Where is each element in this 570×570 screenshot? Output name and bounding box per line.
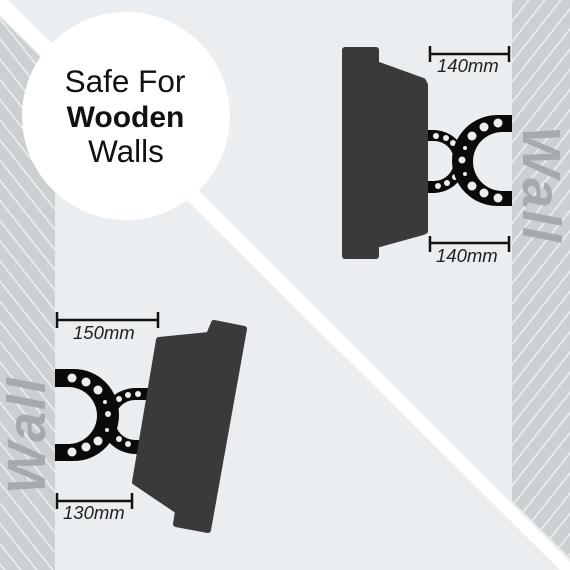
title text: Wooden [67,101,184,134]
title text [65,63,185,169]
panel: left wall [0,17,57,570]
left mount bracket [55,369,150,461]
right mount bracket [424,115,512,206]
dimension: top right 140mm: 140mm [437,55,499,76]
left monitor silhouette [135,323,244,530]
label: right wall text: Wall [511,126,570,244]
dimension: 150mm: 150mm [73,322,135,343]
dimension: bottom right 140mm: 140mm [436,245,498,266]
dimension: bottom right 140mm [430,236,509,266]
title text: Walls [88,133,164,169]
dimension: 130mm [57,493,132,523]
title text: Safe For [65,63,185,99]
title circle [22,12,230,220]
dimension: top right 140mm [430,46,509,76]
dimension: 150mm [57,312,158,343]
right monitor silhouette [345,50,425,256]
dimension: 130mm: 130mm [63,502,125,523]
panel: right wall [511,0,570,558]
